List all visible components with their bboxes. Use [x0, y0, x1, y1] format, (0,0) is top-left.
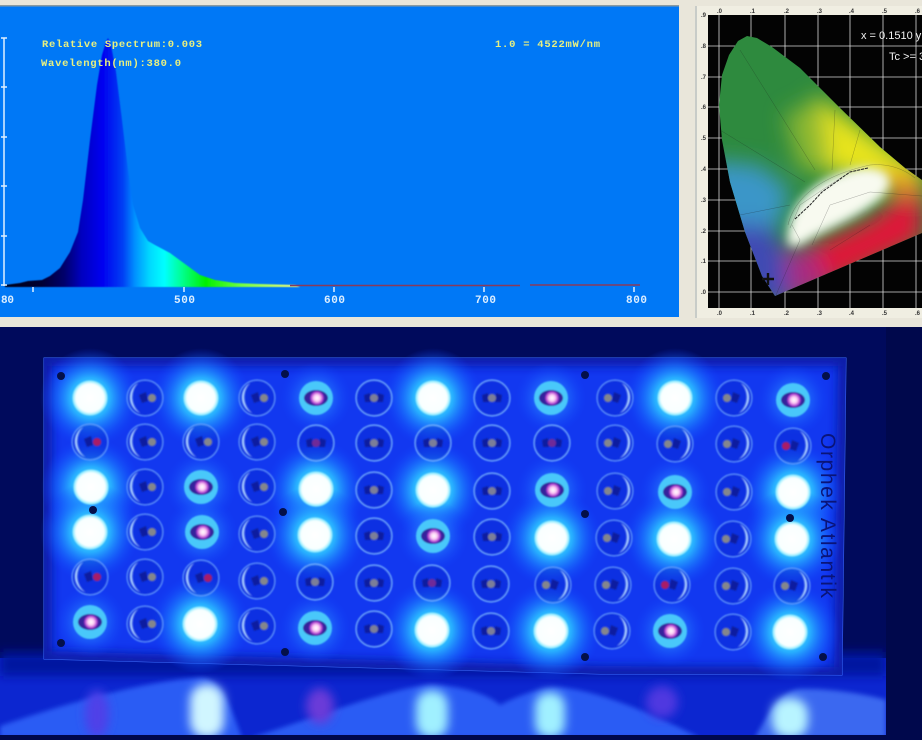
brand label: Orphek Atlantik — [816, 433, 839, 598]
axis tick labels: .7 — [701, 75, 707, 81]
panel: CIE chromaticity diagram — [695, 6, 922, 318]
LED row 3 — [73, 469, 811, 510]
axis tick labels: .6 — [915, 9, 921, 15]
x axis labels — [1, 295, 647, 307]
axis tick labels: .8 — [701, 44, 707, 50]
axis tick labels: .1 — [701, 259, 707, 265]
red tail line — [290, 284, 640, 286]
black body locus — [795, 168, 868, 219]
LED row 6 — [73, 605, 808, 650]
x axis labels: 80 — [1, 295, 14, 307]
grid lines — [708, 15, 922, 308]
measured point marker — [762, 273, 774, 285]
LED row 5 — [72, 559, 810, 604]
light pools — [0, 678, 242, 738]
axis tick labels: .0 — [717, 9, 723, 15]
LED row 4 — [72, 514, 810, 557]
coordinate readout: x = 0.1510 y — [861, 30, 922, 42]
axis tick labels: .2 — [701, 229, 707, 235]
x axis labels: 500 — [174, 295, 195, 307]
axis tick labels: .5 — [882, 9, 888, 15]
axis tick labels: .0 — [701, 290, 707, 296]
axis tick labels: .6 — [915, 311, 921, 317]
axis tick labels: .2 — [784, 9, 790, 15]
LED row 2 — [72, 424, 811, 464]
x axis labels: 700 — [475, 295, 496, 307]
region boundary lines — [720, 50, 922, 295]
readout text: Relative Spectrum:0.003 — [42, 39, 202, 51]
axis tick labels: .3 — [701, 198, 707, 204]
axis tick labels: .4 — [849, 311, 855, 317]
mounting screws — [57, 370, 830, 661]
axis tick labels: .4 — [701, 167, 707, 173]
x axis labels: 600 — [324, 295, 345, 307]
surface below the fixture — [0, 652, 886, 738]
axis tick labels: .3 — [817, 9, 823, 15]
LED row 1 — [72, 380, 810, 417]
panel: relative spectrum chart — [0, 5, 679, 317]
axis tick labels: .1 — [750, 311, 756, 317]
x axis labels: 800 — [626, 295, 647, 307]
light halos — [40, 348, 843, 682]
panel edge shading — [44, 358, 846, 675]
axis tick labels: .5 — [701, 136, 707, 142]
axes — [1, 38, 634, 292]
readout text: Wavelength(nm):380.0 — [41, 58, 181, 70]
coordinate readout — [861, 30, 922, 63]
axis tick labels: .0 — [717, 311, 723, 317]
axis tick labels: .5 — [882, 311, 888, 317]
fixture glass panel — [44, 358, 846, 675]
axis tick labels: .6 — [701, 105, 707, 111]
axis tick labels: .3 — [817, 311, 823, 317]
colour horseshoe — [719, 36, 922, 296]
axis tick labels: .9 — [701, 13, 707, 19]
spectrum curve — [5, 38, 300, 287]
axis tick labels: .2 — [784, 311, 790, 317]
axis tick labels: .1 — [750, 9, 756, 15]
readout text — [41, 39, 600, 70]
axis tick labels: .4 — [849, 9, 855, 15]
readout text: 1.0 = 4522mW/nm — [495, 39, 600, 51]
axis tick labels — [701, 9, 921, 317]
LED array — [72, 380, 811, 650]
panel: Orphek Atlantik LED fixture photo — [0, 327, 922, 740]
